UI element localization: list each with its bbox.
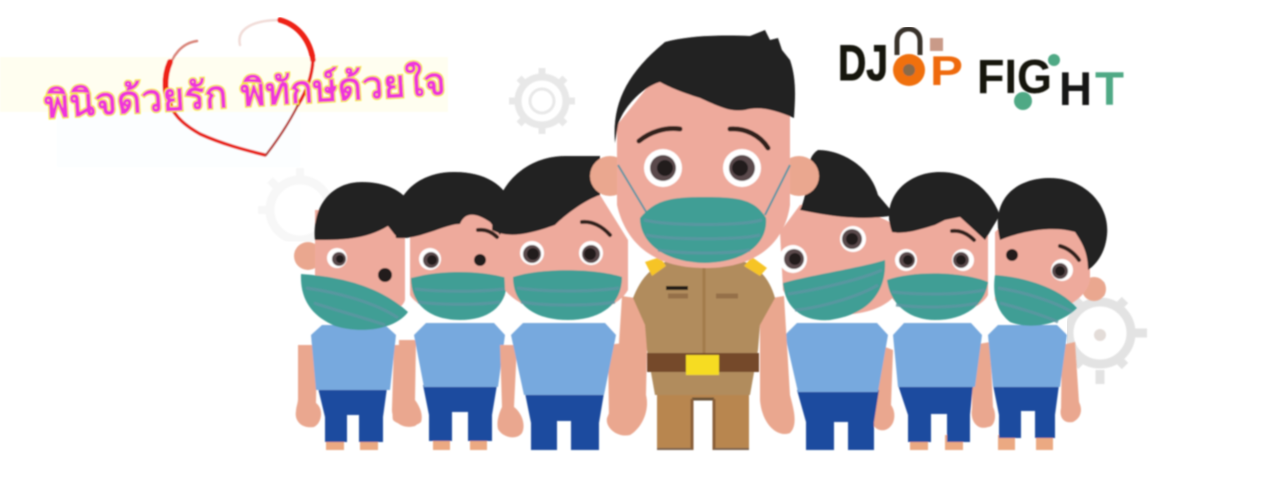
- logo word: DJOP: [838, 29, 963, 94]
- logo word: FIGHT: [977, 51, 1124, 115]
- officer eyes: [644, 149, 761, 187]
- icon: faint virus right: [1069, 282, 1147, 384]
- officer: [590, 30, 819, 450]
- logo word: DJOP: P: [930, 47, 963, 94]
- child 4 right of officer: [779, 150, 895, 450]
- officer eyebrows: [639, 129, 768, 148]
- slogan text: พินิจด้วยรัก พิทักษ์ด้วยใจ: [43, 59, 447, 127]
- officer mask: [618, 165, 790, 263]
- logo word: FIGHT: T: [1095, 62, 1124, 115]
- logo: DJOP FIGHT: [838, 29, 1124, 115]
- officer legs: [657, 385, 749, 450]
- officer pockets and placket: [666, 265, 738, 355]
- officer epaulettes: [645, 257, 767, 276]
- officer shirt: [633, 262, 775, 395]
- officer ears: [590, 156, 819, 196]
- icon: faint virus left: [258, 168, 330, 240]
- icon: faint virus top: [509, 68, 575, 134]
- child 1 far left: [294, 182, 420, 450]
- logo word: FIGHT: H: [1059, 62, 1092, 115]
- child 2: [393, 172, 512, 450]
- officer head: [617, 78, 790, 268]
- officer arms: [607, 296, 795, 436]
- officer belt and buckle: [647, 353, 759, 375]
- child 3: [492, 156, 629, 450]
- icon: red heart outline: [165, 20, 313, 155]
- slogan: heart and Thai text: [0, 20, 448, 167]
- officer hair: [615, 30, 795, 143]
- child 5: [887, 172, 1000, 450]
- logo word: FIGHT: FIG: [977, 51, 1052, 104]
- logo word: DJOP: DJ: [838, 35, 888, 91]
- child 6 far right: [988, 178, 1107, 450]
